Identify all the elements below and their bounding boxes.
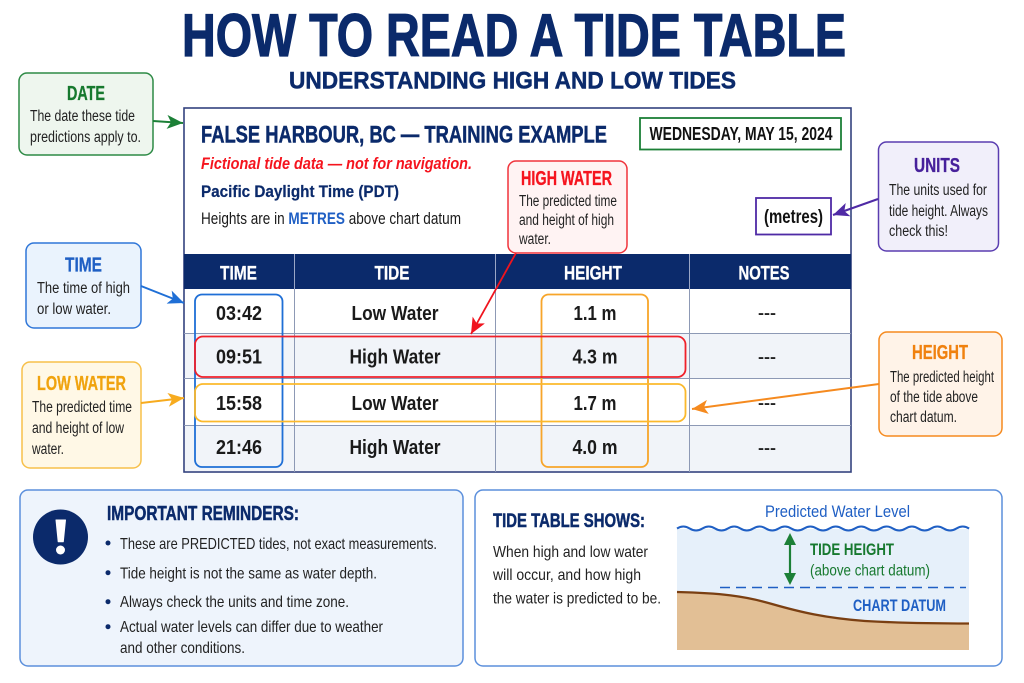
row 3: 15:58: [216, 393, 262, 415]
date box: [640, 118, 841, 150]
callout: date: [19, 73, 153, 155]
reminders list: Always check the units and time zone.: [120, 594, 349, 611]
row 2: 4.3 m: [572, 346, 618, 368]
reminders list: [106, 536, 437, 657]
units box: (metres): [764, 207, 823, 228]
highlight: low water row: [195, 384, 686, 422]
callout: units: [878, 142, 998, 251]
row 4: ---: [758, 440, 776, 457]
chart datum label: CHART DATUM: [853, 596, 946, 615]
row 2: [216, 346, 776, 368]
callout: low water: LOW WATER: [37, 373, 126, 395]
datum dashed line: [720, 586, 966, 588]
highlight: high water row: [195, 336, 686, 377]
title: HOW TO READ A TIDE TABLE: [182, 2, 846, 69]
panel: tide table: [184, 108, 851, 472]
callout: time: TIME: [65, 254, 102, 276]
reminders list: These are PREDICTED tides, not exact measurements.: [120, 536, 437, 553]
subtitle: UNDERSTANDING HIGH AND LOW TIDES: [289, 68, 736, 94]
shows text: [492, 544, 661, 608]
predicted water level label: Predicted Water Level: [765, 502, 910, 521]
callout: height: [879, 332, 1002, 436]
callout: time: or low water.: [37, 301, 111, 318]
table rows: [184, 289, 851, 472]
callout: high water: water.: [518, 231, 551, 248]
icon: exclamation: [33, 510, 88, 564]
row 2: 09:51: [216, 346, 262, 368]
arrow: height to row: [692, 384, 879, 409]
shows text: the water is predicted to be.: [493, 590, 661, 608]
table header row: [184, 254, 851, 289]
row 4: High Water: [350, 437, 441, 459]
row 4: 21:46: [216, 437, 262, 459]
row 2: ---: [758, 349, 776, 366]
row 1: 1.1 m: [574, 303, 616, 325]
callout: high water: The predicted time: [519, 193, 617, 210]
panel: tide table shows: [475, 490, 1002, 666]
callout: high water: and height of high: [519, 212, 614, 229]
row 3: 1.7 m: [574, 393, 616, 415]
reminders list: Tide height is not the same as water depth.: [120, 566, 377, 582]
callout: date: DATE: [67, 83, 105, 105]
highlight: time column: [195, 294, 282, 467]
row 1: 03:42: [216, 303, 262, 325]
callout: height: of the tide above: [890, 389, 978, 406]
table location heading: FALSE HARBOUR, BC — TRAINING EXAMPLE: [201, 122, 607, 149]
row 4: [216, 437, 776, 459]
callout: units: check this!: [889, 223, 948, 240]
wave line: [677, 526, 969, 530]
shows text: will occur, and how high: [492, 567, 641, 584]
table header row: TIME: [220, 264, 257, 284]
row 3: [216, 393, 776, 415]
units note: Heights are in METRES above chart datum: [201, 210, 461, 228]
arrow: units to box: [833, 199, 878, 215]
arrow: date to table: [153, 121, 183, 123]
callout: low water: [22, 362, 141, 468]
callout: time: The time of high: [37, 280, 130, 297]
row 1: Low Water: [352, 303, 439, 325]
row 3: Low Water: [352, 393, 439, 415]
callout: height: HEIGHT: [912, 342, 968, 364]
highlight: height column: [542, 294, 648, 467]
row 4: 4.0 m: [572, 437, 618, 459]
row 1: [216, 303, 776, 325]
callout: date: predictions apply to.: [30, 129, 141, 146]
callout: low water: water.: [31, 441, 64, 458]
callout: high water: [508, 161, 627, 253]
reminders heading: IMPORTANT REMINDERS:: [107, 503, 299, 525]
reminders list: and other conditions.: [120, 640, 245, 657]
fictional data warning: Fictional tide data — not for navigation.: [201, 154, 472, 173]
callout: units: tide height. Always: [889, 203, 988, 220]
callout: height: chart datum.: [890, 409, 957, 426]
arrow: low water to table: [141, 398, 184, 403]
callout: units: The units used for: [889, 182, 987, 199]
shows heading: TIDE TABLE SHOWS:: [493, 511, 645, 532]
callout: time: [26, 243, 141, 328]
row 3: ---: [758, 395, 776, 412]
table header row: NOTES: [738, 264, 790, 284]
callout: low water: The predicted time: [32, 399, 132, 416]
callout: units: UNITS: [914, 155, 960, 177]
arrow: time to table: [141, 286, 184, 303]
tide diagram: [677, 502, 969, 650]
table header row: HEIGHT: [564, 264, 622, 284]
tide height label: TIDE HEIGHT: [810, 540, 894, 559]
table header row: TIDE: [374, 264, 410, 284]
reminders list: Actual water levels can differ due to weather: [120, 619, 384, 636]
units box: [756, 198, 831, 234]
date box: WEDNESDAY, MAY 15, 2024: [650, 124, 832, 144]
callout: low water: and height of low: [32, 420, 125, 437]
arrow: high water to row: [471, 253, 516, 334]
row 1: ---: [758, 305, 776, 322]
shows text: When high and low water: [493, 544, 649, 561]
time zone: Pacific Daylight Time (PDT): [201, 182, 399, 201]
height arrow: [784, 533, 796, 585]
panel: important reminders: [20, 490, 463, 666]
row 2: High Water: [350, 346, 441, 368]
callout: date: The date these tide: [30, 108, 135, 125]
callout: high water: HIGH WATER: [521, 168, 612, 190]
above chart datum label: (above chart datum): [810, 562, 930, 580]
